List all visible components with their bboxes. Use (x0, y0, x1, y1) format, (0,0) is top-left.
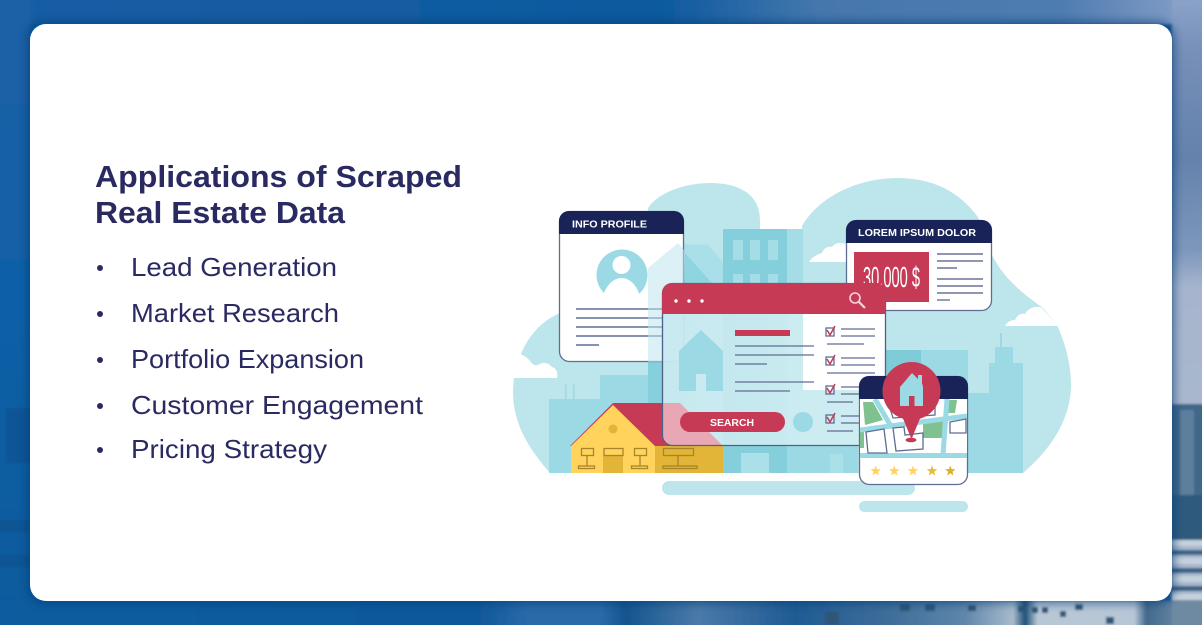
card: info profile (559, 211, 684, 362)
heading: Real Estate Data (95, 195, 346, 230)
bullet list: Portfolio Expansion (131, 344, 364, 374)
card: lorem ipsum price: 30,000 $ (863, 262, 920, 294)
map pin (882, 362, 940, 442)
heading: Applications of Scraped (95, 159, 462, 194)
ground bars (662, 481, 915, 495)
card: lorem ipsum price (846, 220, 992, 310)
bullet list: Lead Generation (131, 252, 337, 282)
building windows (733, 240, 778, 286)
icon: house (679, 330, 723, 391)
bullet list: Market Research (131, 298, 339, 328)
search button (680, 412, 785, 432)
icon: magnifier (850, 293, 865, 308)
yellow house (570, 403, 723, 473)
background house roof (678, 244, 723, 284)
card: map with pin and star rating (859, 362, 968, 484)
search button: SEARCH (710, 418, 754, 429)
heading (95, 159, 462, 230)
bullet list: Pricing Strategy (131, 434, 327, 464)
rating stars (870, 466, 956, 475)
illustration: real estate app scene (510, 178, 1071, 512)
background blob (513, 178, 1071, 473)
card: info profile: INFO PROFILE (572, 218, 647, 230)
clouds (510, 243, 1058, 378)
map (860, 399, 967, 459)
background buildings (549, 229, 1023, 473)
card: lorem ipsum price: LOREM IPSUM DOLOR (858, 227, 976, 239)
window dots (674, 299, 704, 303)
bullet list: Customer Engagement (131, 390, 424, 420)
checklist (826, 326, 875, 431)
browser search window (662, 283, 886, 446)
bullet list (97, 252, 424, 464)
